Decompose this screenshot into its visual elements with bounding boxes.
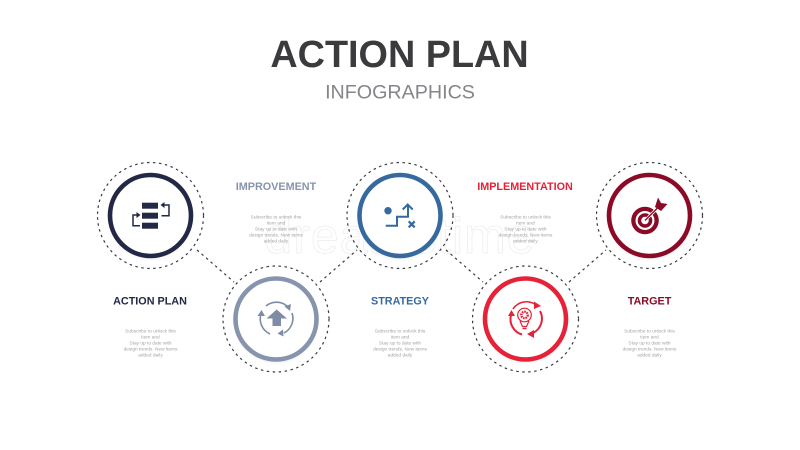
- icon: strategy stairs: [384, 204, 415, 227]
- description: Subscribe to unlock this: [125, 328, 176, 334]
- description: Stay up to date with: [379, 340, 421, 346]
- description: Stay up to date with: [504, 226, 547, 232]
- icon: lightbulb gear in cycle: [508, 302, 542, 338]
- description: design trends. New items: [623, 346, 677, 352]
- label: target: [623, 296, 677, 358]
- description: Stay up to date with: [255, 226, 297, 232]
- description: added daily: [388, 352, 413, 358]
- description: Subscribe to unlock this: [375, 328, 426, 334]
- label: strategy: [371, 296, 430, 358]
- description: added daily: [138, 352, 163, 358]
- label: improvement: [236, 181, 317, 244]
- step 5: target circle: [596, 162, 702, 268]
- watermark: dreamstime: [264, 208, 536, 264]
- description: item and: [640, 334, 659, 340]
- label: strategy: STRATEGY: [371, 296, 430, 308]
- description: Subscribe to unlock this: [624, 328, 675, 334]
- description: [499, 214, 553, 244]
- step 2: improvement circle: [223, 266, 329, 372]
- description: design trends. New items: [373, 346, 428, 352]
- description: item and: [391, 334, 410, 340]
- description: item and: [516, 220, 535, 226]
- description: item and: [141, 334, 160, 340]
- description: [249, 214, 304, 244]
- description: design trends. New items: [124, 346, 178, 352]
- label: improvement: IMPROVEMENT: [236, 181, 317, 193]
- description: [124, 328, 178, 358]
- label: action plan: ACTION PLAN: [113, 296, 187, 308]
- icon: list with swap arrows: [133, 202, 169, 229]
- step 3: strategy circle: [347, 162, 453, 268]
- step 1: action plan circle: [98, 162, 204, 268]
- step 4: implementation circle: [472, 266, 578, 372]
- description: Stay up to date with: [129, 340, 172, 346]
- dashed connectors: [197, 250, 606, 282]
- description: item and: [267, 220, 286, 226]
- icon: target with dart: [631, 198, 668, 234]
- description: [373, 328, 428, 358]
- description: added daily: [264, 238, 289, 244]
- description: added daily: [637, 352, 662, 358]
- label: target: TARGET: [628, 296, 672, 308]
- description: Subscribe to unlock this: [500, 214, 551, 220]
- description: design trends. New items: [499, 232, 553, 238]
- subtitle: INFOGRAPHICS: [325, 82, 475, 104]
- title: ACTION PLAN: [270, 34, 529, 76]
- description: [623, 328, 677, 358]
- description: Subscribe to unlock this: [251, 214, 302, 220]
- description: Stay up to date with: [628, 340, 671, 346]
- description: added daily: [513, 238, 538, 244]
- label: action plan: [113, 296, 187, 358]
- icon: up arrow in cycle: [258, 302, 293, 336]
- label: implementation: IMPLEMENTATION: [477, 181, 573, 193]
- label: implementation: [477, 181, 573, 244]
- description: design trends. New items: [249, 232, 304, 238]
